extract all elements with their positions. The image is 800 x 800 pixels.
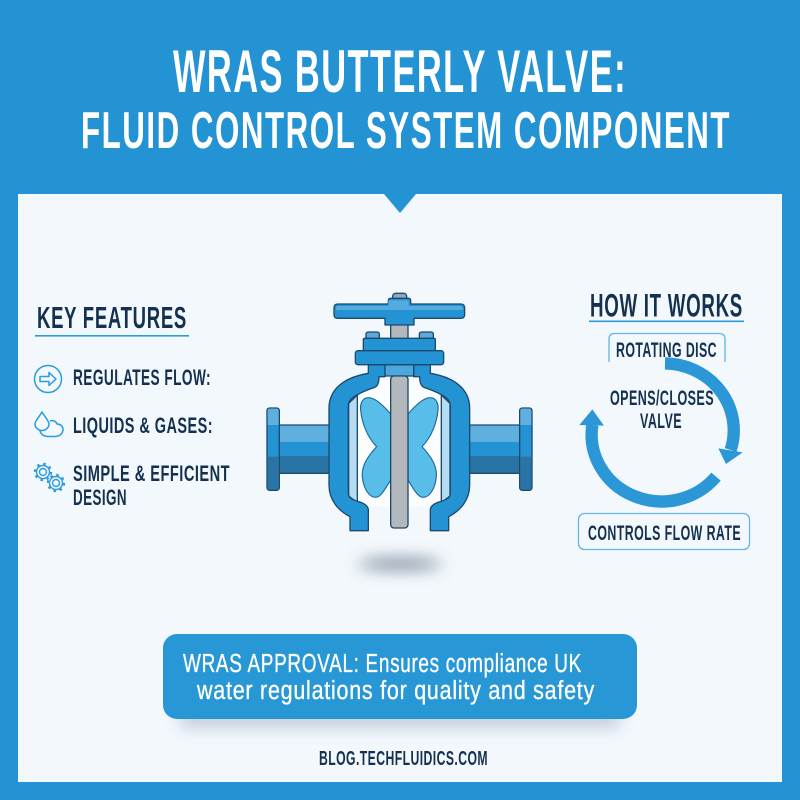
callout: WRAS approval	[163, 634, 637, 719]
icon: gears	[35, 464, 64, 491]
footer url: BLOG.TECHFLUIDICS.COM	[319, 748, 488, 770]
handwheel	[334, 293, 465, 325]
heading: key features: KEY FEATURES	[37, 300, 187, 335]
valve interior	[349, 380, 450, 507]
icon: drop and cloud	[35, 412, 63, 436]
stem	[391, 324, 408, 528]
callout: WRAS approval: water regulations for quality and safety	[196, 677, 595, 705]
feature: simple and efficient design: SIMPLE & EFFICIENT	[73, 461, 230, 486]
panel: key features	[34, 300, 230, 510]
feature: liquids and gases: LIQUIDS & GASES:	[73, 413, 213, 438]
label: opens closes valve: OPENS/CLOSES	[610, 387, 714, 410]
callout: WRAS approval: WRAS APPROVAL: Ensures compliance UK	[183, 650, 582, 678]
feature: simple and efficient design	[73, 461, 230, 510]
box: rotating disc: ROTATING DISC	[616, 339, 717, 362]
feature: regulates flow: REGULATES FLOW:	[73, 365, 211, 390]
box: rotating disc	[609, 334, 725, 362]
panel: main content	[18, 194, 782, 782]
box: controls flow rate	[578, 514, 750, 550]
icon: flow arrow	[34, 366, 62, 392]
cycle arrows	[579, 363, 743, 501]
valve shadow	[358, 559, 442, 569]
valve illustration	[267, 293, 532, 531]
inner sleeves	[349, 395, 450, 503]
butterfly disc	[361, 398, 438, 497]
feature: simple and efficient design: DESIGN	[73, 485, 127, 510]
valve body	[329, 365, 470, 531]
left pipe	[267, 408, 330, 490]
label: opens closes valve	[610, 387, 714, 433]
title	[81, 38, 731, 160]
banner shadow	[180, 708, 620, 728]
panel: how it works	[578, 288, 750, 550]
label: opens closes valve: VALVE	[640, 410, 682, 433]
right pipe	[469, 408, 532, 490]
bonnet and bolts	[355, 332, 444, 365]
